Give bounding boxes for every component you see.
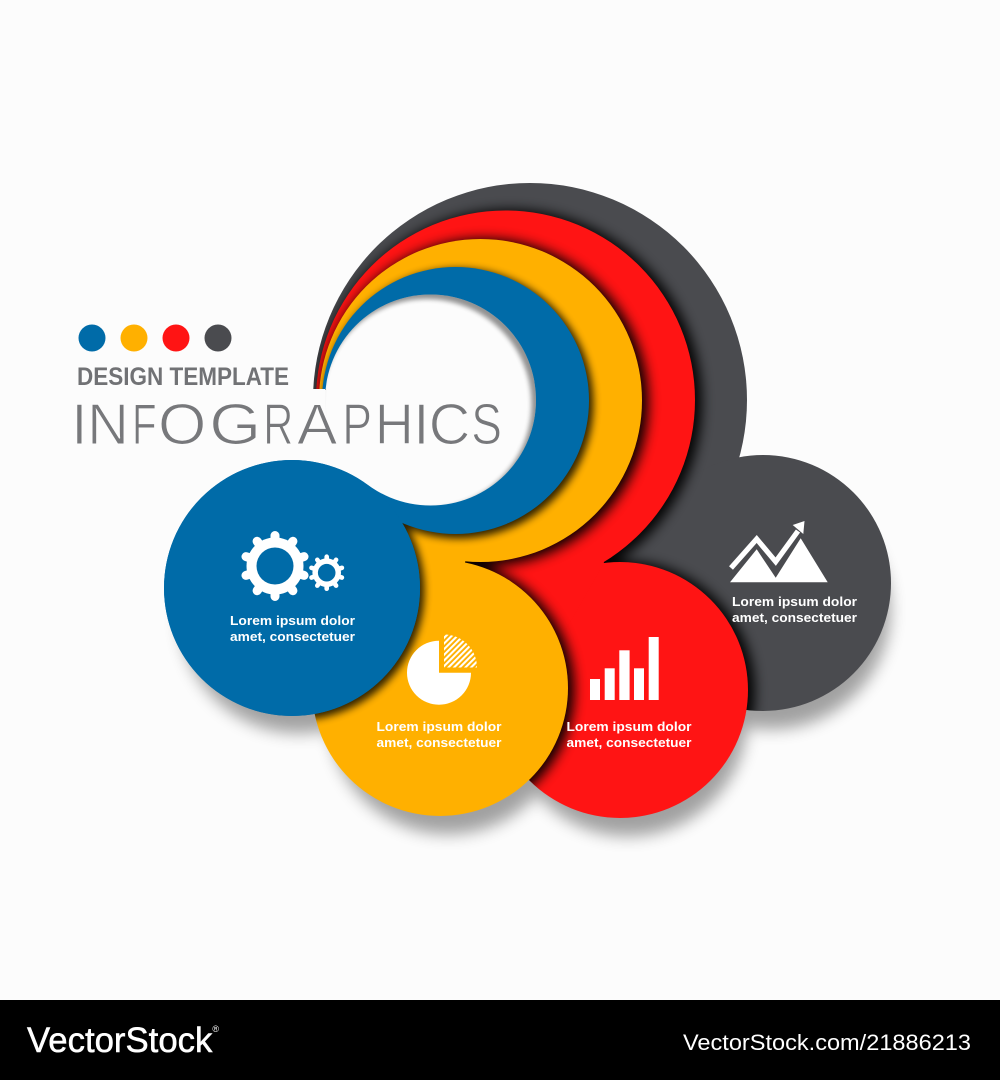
text: grey circle: Lorem ipsum dolor <box>732 594 857 609</box>
large gear <box>246 536 304 596</box>
icon: gears <box>246 536 342 596</box>
heading: infographics: N <box>87 393 129 457</box>
text: grey circle: amet, consectetuer <box>732 610 857 625</box>
layer: amber <box>312 239 642 816</box>
shadow of blue on amber <box>314 262 600 725</box>
soft ground shadows <box>180 491 890 836</box>
inner shadow in white centre <box>326 294 536 504</box>
heading: infographics: S <box>471 393 502 457</box>
heading: infographics: I <box>413 393 429 457</box>
shadow of red on grey <box>313 202 762 711</box>
text: blue circle <box>230 613 355 644</box>
text: amber circle: Lorem ipsum dolor <box>376 719 502 734</box>
text: blue circle: amet, consectetuer <box>230 629 355 644</box>
layer: blue <box>164 267 589 716</box>
icon: bar chart <box>590 637 659 700</box>
text: blue circle: Lorem ipsum dolor <box>230 613 355 628</box>
heading: infographics: G <box>209 393 261 457</box>
spiral chart with four circles <box>164 183 891 820</box>
footer band <box>0 1000 1000 1080</box>
heading: infographics: F <box>132 393 157 457</box>
heading: design template: DESIGN TEMPLATE <box>77 364 289 391</box>
heading: infographics: I <box>71 393 87 457</box>
heading: infographics: O <box>158 393 206 457</box>
icon: mountain with arrow <box>730 521 828 582</box>
text: red circle <box>566 719 692 750</box>
heading: infographics: H <box>375 393 414 457</box>
shadow of amber on red <box>316 241 646 818</box>
icon: pie chart <box>407 634 477 705</box>
text: amber circle: amet, consectetuer <box>376 735 502 750</box>
text: red circle: Lorem ipsum dolor <box>566 719 692 734</box>
heading: infographics: P <box>342 393 372 457</box>
footer logo: ® <box>212 1024 219 1034</box>
repaint blue circle over centre shadow <box>164 460 420 716</box>
layer: red <box>316 210 748 818</box>
text: red circle: amet, consectetuer <box>566 735 692 750</box>
text: grey circle <box>732 594 857 625</box>
footer logo: VectorStock <box>27 1021 214 1060</box>
heading: infographics: R <box>263 393 293 457</box>
heading: infographics: C <box>429 393 470 457</box>
footer url: VectorStock.com/21886213 <box>683 1030 971 1055</box>
white centre of spiral <box>325 294 536 506</box>
small gear <box>312 557 342 589</box>
text: amber circle <box>376 719 502 750</box>
colour dots <box>78 324 232 352</box>
layer: grey <box>313 183 891 711</box>
heading: infographics: A <box>297 393 338 457</box>
